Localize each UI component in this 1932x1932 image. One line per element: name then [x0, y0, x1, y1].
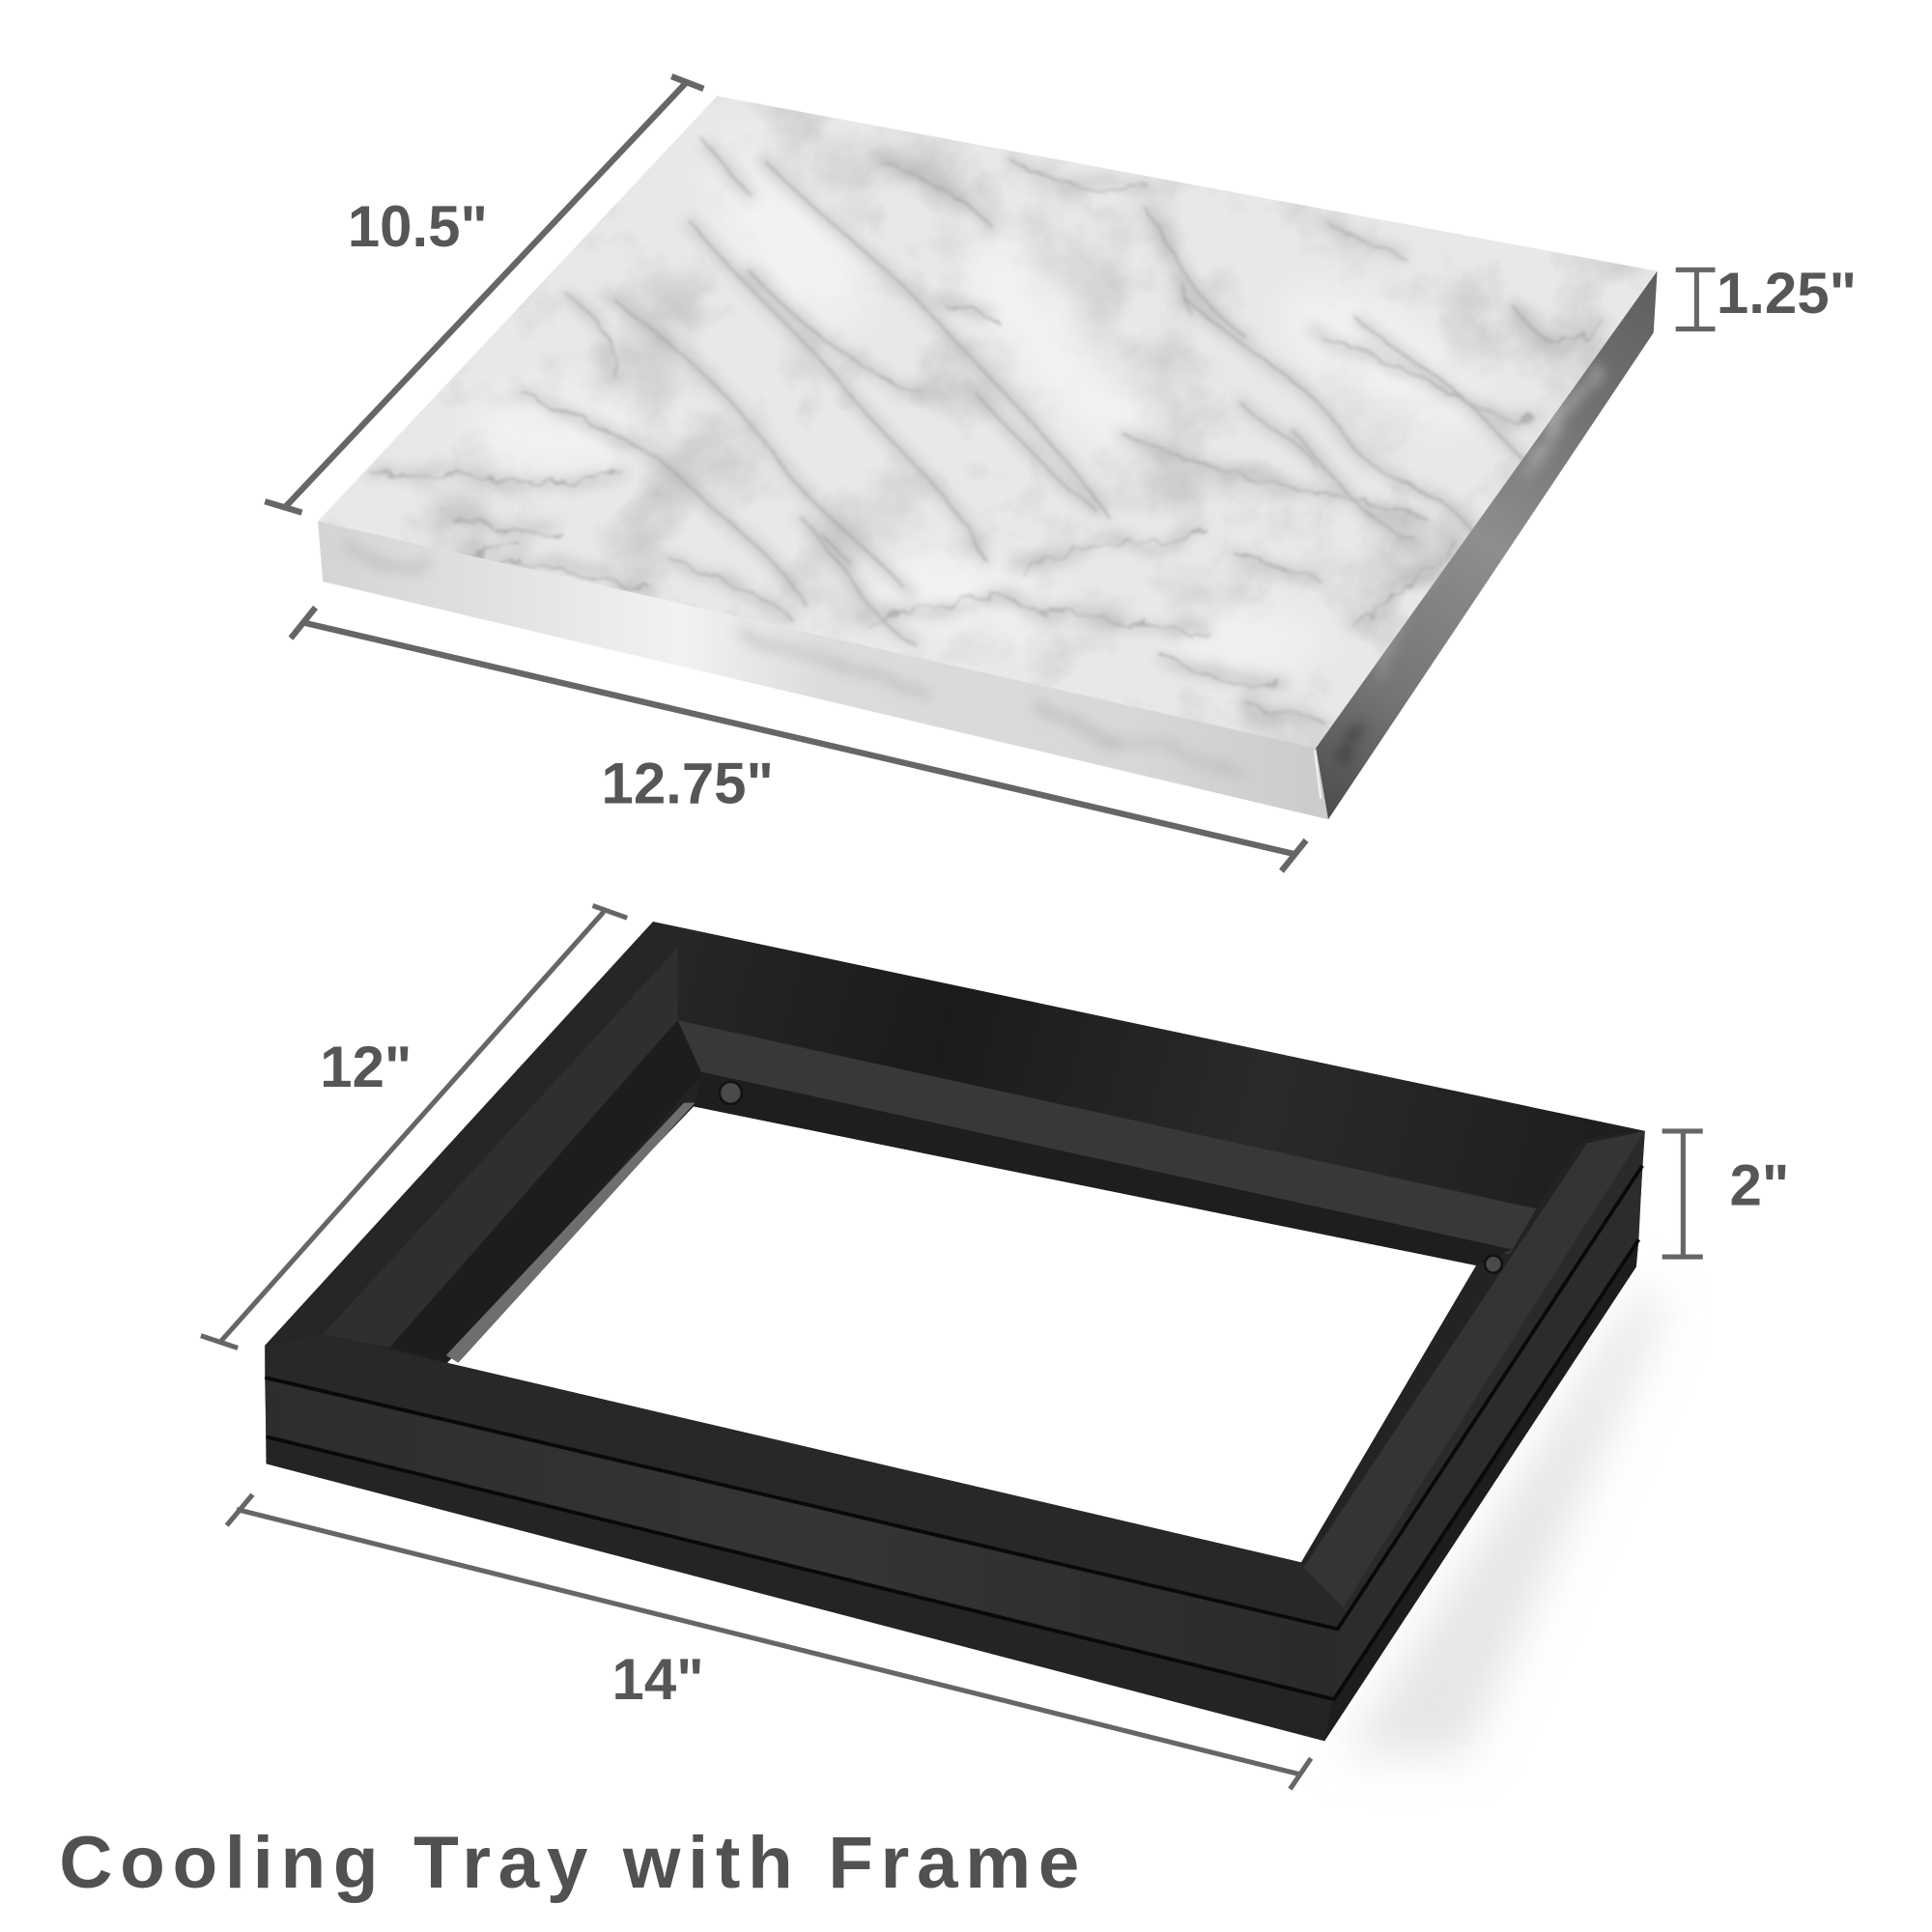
marble top surface: [318, 97, 1658, 819]
frame rim right: [1303, 1131, 1645, 1608]
frame front layers: [265, 1378, 1337, 1699]
label 2: 2": [1730, 1152, 1789, 1217]
dimension: frame depth: [201, 906, 627, 1348]
dimension: frame height: [1662, 1131, 1703, 1257]
label 10.5: 10.5": [348, 194, 488, 259]
frame screws: [720, 1082, 1502, 1273]
label 12.75: 12.75": [602, 752, 774, 816]
frame back ledge: [678, 1020, 1537, 1254]
title: Cooling Tray with Frame: [59, 1822, 1087, 1904]
marble right edge: [1315, 271, 1658, 819]
frame base shape: [265, 922, 1645, 1741]
frame seams: [265, 1166, 1642, 1700]
dimension: frame width: [227, 1494, 1311, 1789]
black frame: [265, 922, 1645, 1741]
frame back wall: [653, 922, 1645, 1208]
marble front edge: [318, 522, 1328, 819]
label 1.25: 1.25": [1717, 261, 1857, 326]
frame shadow: [1343, 1282, 1663, 1756]
frame left wall: [265, 922, 678, 1346]
frame top rim: [265, 1334, 1343, 1627]
label 14: 14": [612, 1647, 704, 1712]
marble slab: [318, 97, 1658, 819]
frame right layers: [1337, 1131, 1645, 1629]
dimension: marble height: [1676, 270, 1716, 329]
label 12: 12": [320, 1035, 412, 1099]
dimension: marble width: [291, 608, 1306, 871]
dimension: marble depth: [265, 76, 703, 513]
